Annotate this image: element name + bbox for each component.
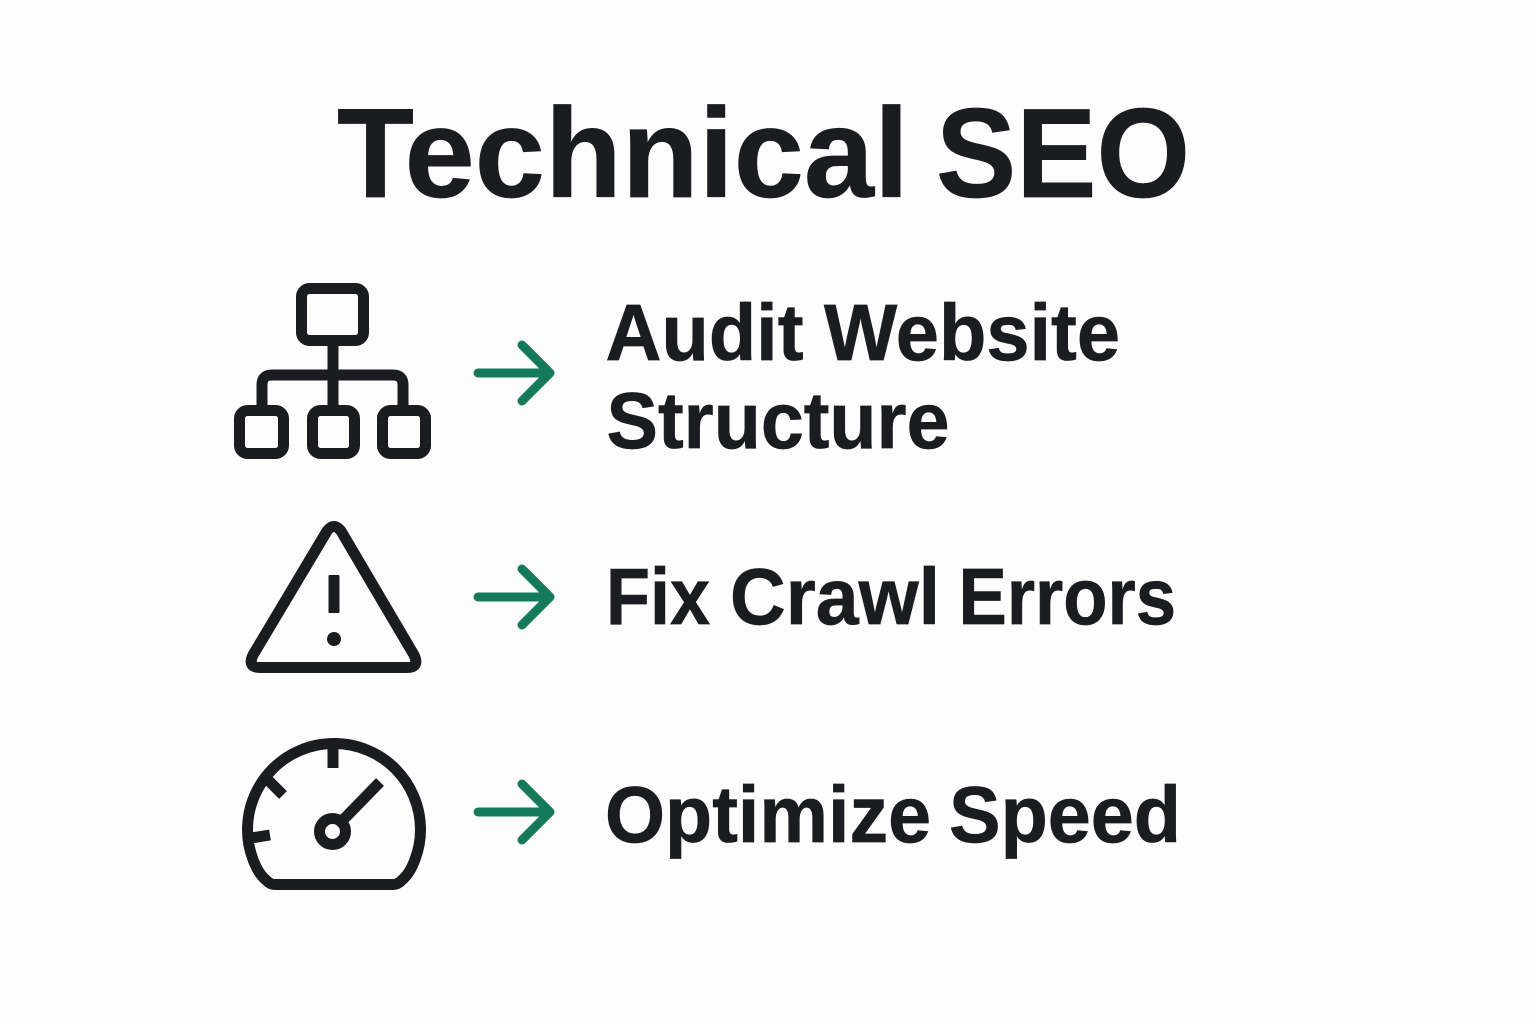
label: optimize speed: Optimize bbox=[605, 770, 931, 859]
row 2: fix crawl errors bbox=[251, 526, 1176, 668]
title: SEO bbox=[936, 82, 1190, 224]
label: audit website structure: Structure bbox=[606, 376, 950, 465]
icon: speedometer gauge bbox=[248, 744, 420, 884]
label: audit website structure: Website bbox=[824, 288, 1120, 377]
arrow: to crawl errors label bbox=[478, 569, 550, 625]
label: optimize speed bbox=[605, 770, 1181, 859]
label: fix crawl errors bbox=[606, 552, 1176, 641]
label: fix crawl errors: Crawl bbox=[730, 552, 940, 641]
arrow: to audit label bbox=[478, 345, 550, 401]
label: optimize speed: Speed bbox=[949, 770, 1181, 859]
label: fix crawl errors: Fix bbox=[606, 552, 710, 641]
icon: site hierarchy bbox=[240, 288, 426, 454]
title: Technical bbox=[337, 82, 909, 224]
row 3: optimize speed bbox=[248, 744, 1181, 884]
arrow: to optimize speed label bbox=[478, 784, 550, 840]
label: audit website structure: Audit bbox=[606, 288, 804, 377]
row 1: audit website structure bbox=[240, 288, 1120, 465]
title bbox=[337, 82, 1190, 224]
label: audit website structure bbox=[606, 288, 1120, 465]
icon: warning triangle bbox=[251, 526, 416, 668]
label: fix crawl errors: Errors bbox=[958, 552, 1176, 641]
